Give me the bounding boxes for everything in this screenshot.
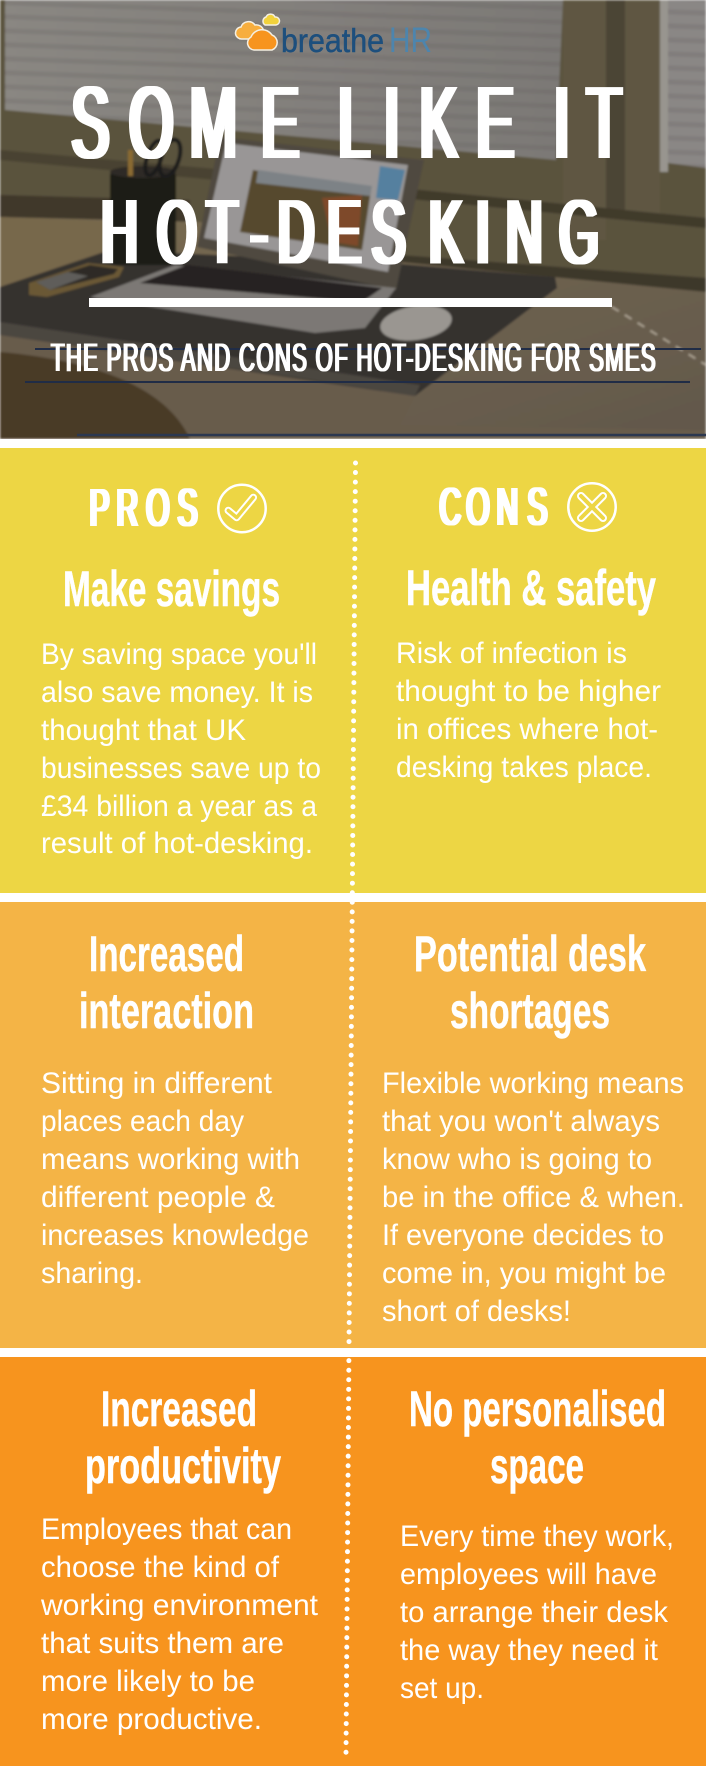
heading: potential desk shortages (414, 926, 646, 1039)
icon: cross (568, 483, 616, 531)
pen cup and scissors (110, 137, 184, 265)
heading: increased interaction: interaction (79, 983, 254, 1039)
heading: increased productivity: Increased (101, 1381, 257, 1437)
panel: interaction vs desk shortages (0, 902, 706, 1348)
text: increased productivity: more likely to be (41, 1665, 255, 1698)
text: increased productivity: choose the kind of (41, 1551, 280, 1584)
heading: potential desk shortages: shortages (450, 983, 610, 1039)
heading: increased productivity (85, 1381, 281, 1494)
text: potential desk shortages: know who is going to (382, 1143, 652, 1176)
logo: breatheHR (235, 14, 432, 60)
text: potential desk shortages: come in, you might be (382, 1257, 666, 1290)
title: HOT-DESKING (101, 180, 599, 283)
text: health and safety (396, 637, 661, 784)
text: no personalised space: set up. (400, 1672, 484, 1705)
text: potential desk shortages: Flexible working means (382, 1067, 684, 1100)
panel: productivity vs personalised space (0, 1357, 706, 1766)
text: potential desk shortages: If everyone decides to (382, 1219, 664, 1252)
text: no personalised space: to arrange their desk (400, 1596, 669, 1629)
text: potential desk shortages (382, 1067, 685, 1328)
mouse (378, 307, 454, 342)
logo: breatheHR: HR (389, 21, 432, 60)
text: no personalised space: employees will have (400, 1558, 657, 1591)
text: increased interaction: different people & (41, 1181, 275, 1214)
text: increased interaction: sharing. (41, 1257, 143, 1290)
text: no personalised space (400, 1520, 674, 1705)
phone (29, 263, 124, 297)
text: no personalised space: Every time they work, (400, 1520, 674, 1553)
text: make savings: result of hot-desking. (41, 827, 313, 860)
panel: savings vs health and safety (0, 448, 706, 893)
text: no personalised space: the way they need it (400, 1634, 659, 1667)
text: increased interaction: places each day (41, 1105, 244, 1138)
heading: cons: CONS (439, 478, 547, 537)
text: make savings: By saving space you'll (41, 638, 317, 671)
laptop (90, 137, 424, 333)
logo: breatheHR: breathe (281, 22, 384, 59)
text: increased interaction: means working with (41, 1143, 300, 1176)
text: make savings: £34 billion a year as a (41, 790, 317, 823)
text: health and safety: desking takes place. (396, 751, 652, 784)
icon: check (218, 485, 266, 532)
text: potential desk shortages: short of desks! (382, 1295, 571, 1328)
title (72, 65, 621, 283)
heading: make savings: Make savings (63, 561, 280, 617)
text: increased productivity: Employees that can (41, 1513, 292, 1546)
text: health and safety: Risk of infection is (396, 637, 627, 670)
heading: pros: PROS (90, 479, 197, 538)
text: health and safety: in offices where hot- (396, 713, 658, 746)
text: make savings: thought that UK (41, 714, 246, 747)
title rule (89, 298, 612, 307)
text: health and safety: thought to be higher (396, 675, 661, 708)
icon: clouds (235, 14, 280, 50)
text: increased interaction: increases knowledge (41, 1219, 309, 1252)
heading: increased interaction (79, 926, 254, 1039)
text: potential desk shortages: be in the office & when. (382, 1181, 685, 1214)
text: make savings: businesses save up to (41, 752, 321, 785)
text: increased productivity: working environment (40, 1589, 319, 1622)
text: make savings (41, 638, 321, 860)
text: increased interaction (41, 1067, 309, 1290)
title: SOME LIKE IT (72, 65, 621, 180)
text: increased productivity: that suits them are (41, 1627, 284, 1660)
text: increased interaction: Sitting in different (41, 1067, 273, 1100)
text: increased productivity: more productive. (41, 1703, 262, 1736)
text: potential desk shortages: that you won't always (382, 1105, 660, 1138)
header photo: desk with laptop (0, 0, 706, 439)
text: increased productivity (40, 1513, 319, 1736)
heading: no personalised space: space (490, 1438, 584, 1494)
heading: increased interaction: Increased (89, 926, 244, 982)
text: make savings: also save money. It is (41, 676, 313, 709)
heading: no personalised space (409, 1381, 666, 1494)
heading: increased productivity: productivity (85, 1438, 281, 1494)
